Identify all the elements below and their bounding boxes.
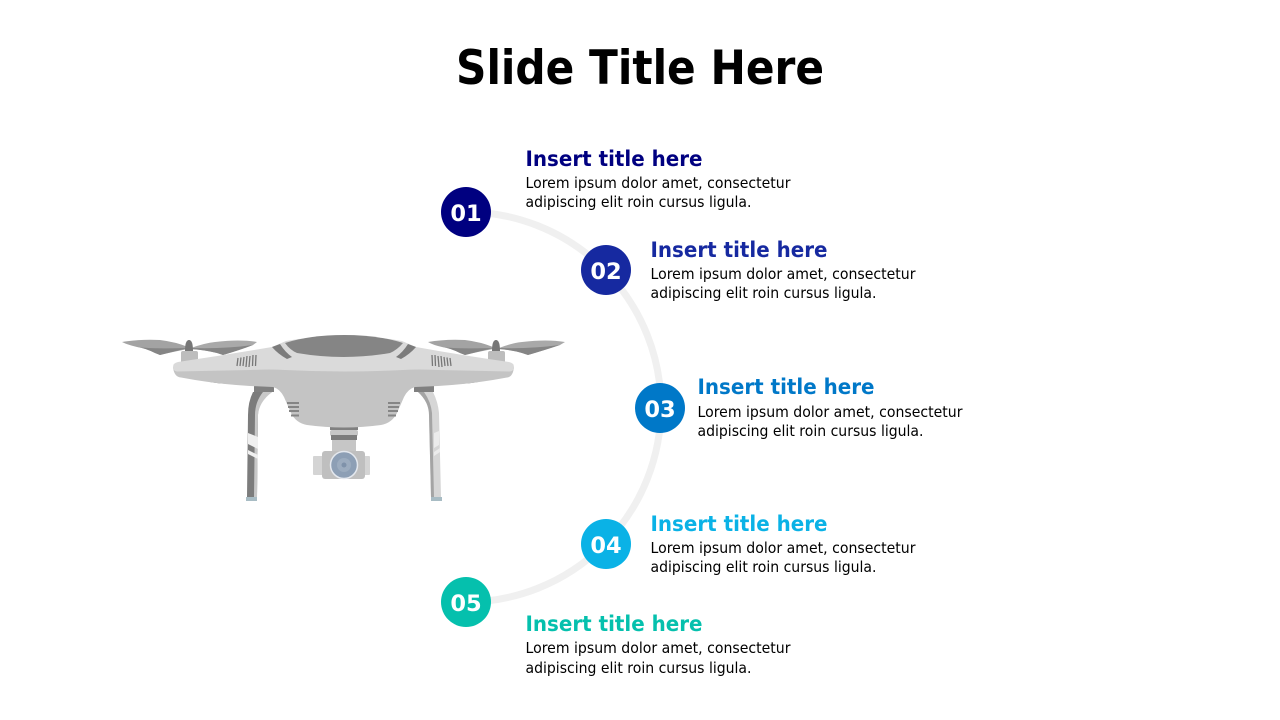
step 03 [635,375,963,440]
drone illustration [122,335,565,501]
right propeller [428,340,565,364]
step 05: Insert title here [526,612,702,636]
gimbal and camera [313,426,370,479]
lower vents [287,403,400,416]
step 02: Insert title here [650,238,828,262]
step 05 [441,577,791,677]
step 05: adipiscing elit roin cursus ligula. [526,659,752,677]
step 03: Lorem ipsum dolor amet, consectetur [698,403,963,421]
step 03: 03 [644,397,676,423]
step 04: 04 [590,533,622,559]
step 01 [441,147,791,237]
step 02 [581,238,916,302]
title: Slide Title Here [456,41,824,96]
step 02: adipiscing elit roin cursus ligula. [650,284,876,302]
left propeller [122,340,257,364]
connecting arc [466,212,661,602]
step 01: 01 [450,201,482,227]
drone canopy [285,335,403,357]
vents [237,355,451,367]
step 02: 02 [590,259,622,285]
canopy side accents [272,344,416,359]
step 04 [581,512,916,576]
step 02: Lorem ipsum dolor amet, consectetur [650,265,916,283]
step 01: Insert title here [526,147,702,171]
step 03: adipiscing elit roin cursus ligula. [698,422,924,440]
right landing leg [414,385,442,501]
drone lower body [173,367,514,428]
step 01: Lorem ipsum dolor amet, consectetur [526,174,791,192]
step 04: Insert title here [650,512,828,536]
drone upper body [173,336,514,372]
step 05: Lorem ipsum dolor amet, consectetur [526,639,791,657]
step 03: Insert title here [698,375,874,399]
step 01: adipiscing elit roin cursus ligula. [526,193,752,211]
step 04: Lorem ipsum dolor amet, consectetur [650,539,916,557]
under-arm shadows [201,377,487,384]
step 05: 05 [450,591,482,617]
step 04: adipiscing elit roin cursus ligula. [650,558,876,576]
left landing leg [246,385,274,501]
